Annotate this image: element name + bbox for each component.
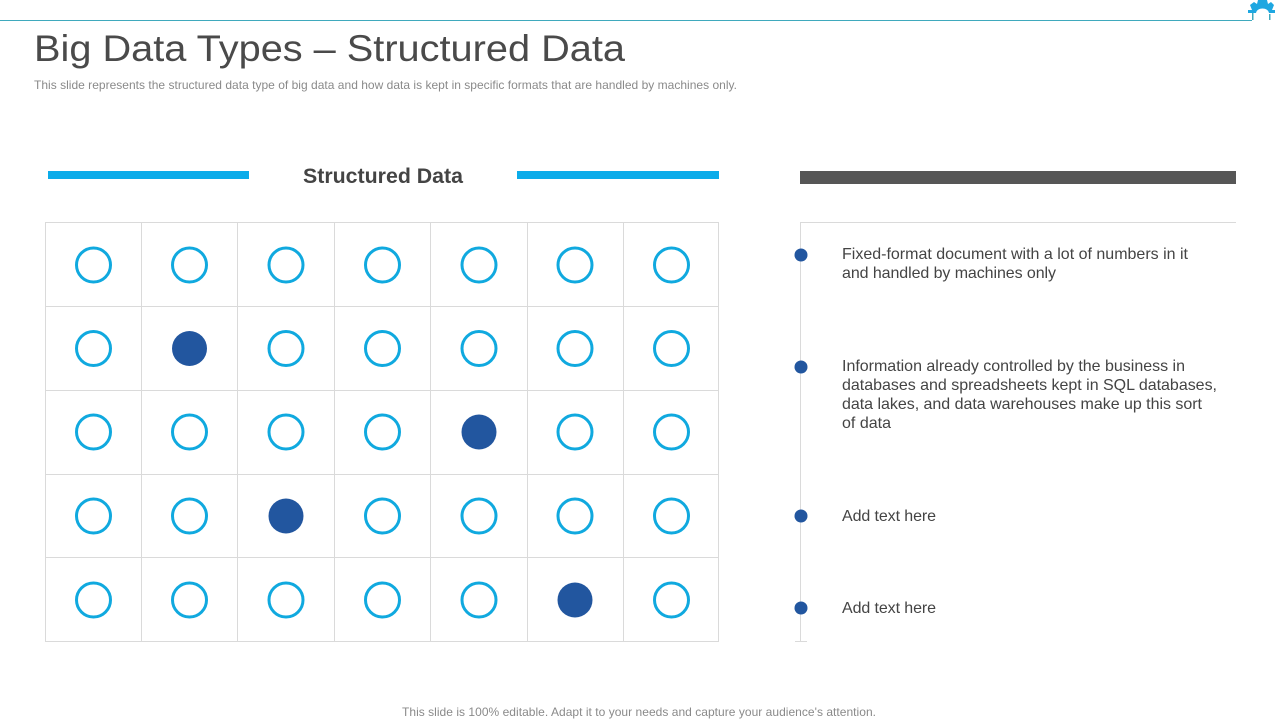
- panel: structured data heading: Structured Data: [303, 165, 463, 188]
- bullet item 2: databases and spreadsheets kept in SQL databases,: [842, 377, 1217, 394]
- header rule: [0, 20, 1252, 21]
- panel: right heading bar: [800, 171, 1236, 184]
- bullet item 2: of data: [842, 415, 891, 432]
- bullet item 4: Add text here: [842, 600, 936, 617]
- bullet item 1: [794, 246, 1189, 282]
- panel: timeline list: [794, 222, 1236, 642]
- footer note: This slide is 100% editable. Adapt it to your needs and capture your audience's attention.: [402, 705, 876, 719]
- bullet item 3: Add text here: [842, 508, 936, 525]
- bullet item 2: data lakes, and data warehouses make up this sort: [842, 396, 1203, 413]
- bullet item 2: [794, 358, 1217, 432]
- bullet item 3: [794, 508, 936, 525]
- panel: structured data heading: [48, 165, 719, 188]
- bullet item 1: Fixed-format document with a lot of numbers in it: [842, 246, 1189, 263]
- bullet item 2: Information already controlled by the business in: [842, 358, 1185, 375]
- panel: circle grid: [46, 222, 719, 642]
- title: Big Data Types – Structured Data: [34, 28, 625, 69]
- bullet item 4: [794, 600, 936, 617]
- icon: gear: [1248, 0, 1275, 20]
- subtitle: This slide represents the structured data type of big data and how data is kept in specific formats that are handled by machines only.: [34, 78, 737, 92]
- bullet item 1: and handled by machines only: [842, 265, 1056, 282]
